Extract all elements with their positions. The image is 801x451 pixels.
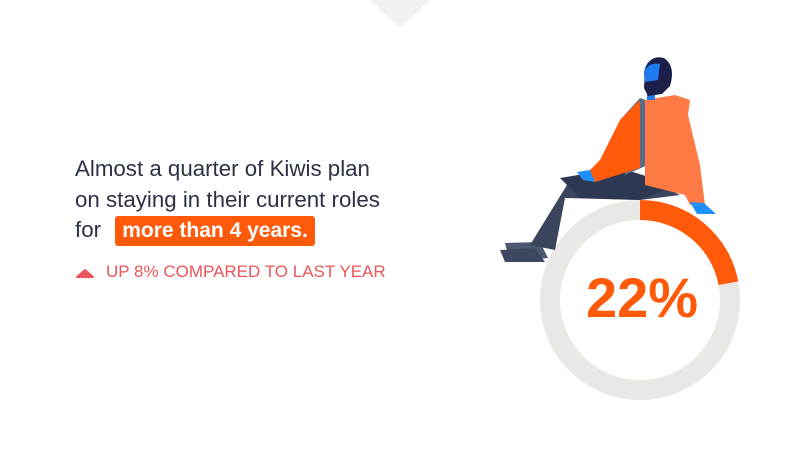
- icon: up arrow: [76, 269, 94, 278]
- decorative top notch: [370, 0, 430, 28]
- headline text: Almost a quarter of Kiwis plan: [75, 156, 370, 181]
- trend indicator: UP 8% COMPARED TO LAST YEAR: [106, 262, 386, 281]
- headline text: on staying in their current roles: [75, 186, 380, 212]
- percentage label: 22%: [586, 266, 698, 329]
- headline text: for: [75, 217, 101, 242]
- highlight badge: more than 4 years.: [122, 219, 308, 242]
- headline text: [75, 156, 380, 246]
- illustration: seated man: [500, 57, 716, 262]
